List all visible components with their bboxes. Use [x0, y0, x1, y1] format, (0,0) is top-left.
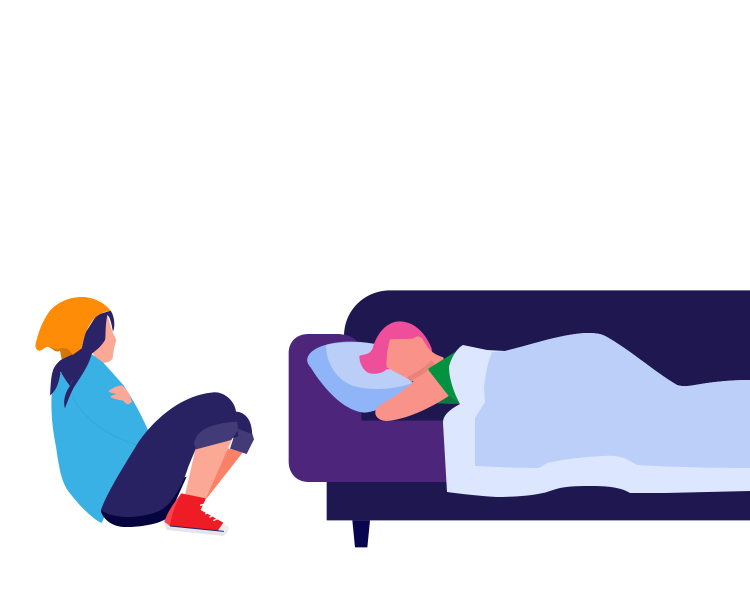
jeans shadow — [101, 477, 187, 527]
blanket — [443, 333, 750, 497]
blanket inner — [475, 333, 750, 468]
sitting girl — [35, 297, 254, 536]
neck and face — [92, 315, 116, 363]
leg back — [200, 448, 243, 498]
green shirt — [428, 352, 460, 404]
hair — [359, 321, 433, 374]
sofa leg — [352, 520, 370, 547]
face — [386, 336, 447, 382]
sofa back and base — [327, 290, 750, 520]
sleeping person — [307, 321, 460, 421]
sneaker — [164, 493, 229, 536]
jeans — [101, 392, 238, 517]
sofa — [289, 290, 750, 547]
laces — [200, 504, 219, 521]
sofa arm — [289, 334, 453, 482]
hair — [50, 311, 114, 408]
hand — [108, 385, 132, 404]
jeans front cuff — [194, 422, 238, 449]
hat shadow — [47, 343, 73, 359]
sweater crease — [73, 397, 137, 445]
leg front — [185, 440, 232, 498]
jeans back cuff — [230, 412, 254, 454]
blue sweater — [51, 354, 148, 523]
hat — [35, 297, 111, 355]
pillow — [307, 342, 413, 413]
neck shadow — [407, 360, 435, 381]
arm — [375, 370, 449, 421]
blanket outer — [443, 333, 750, 497]
